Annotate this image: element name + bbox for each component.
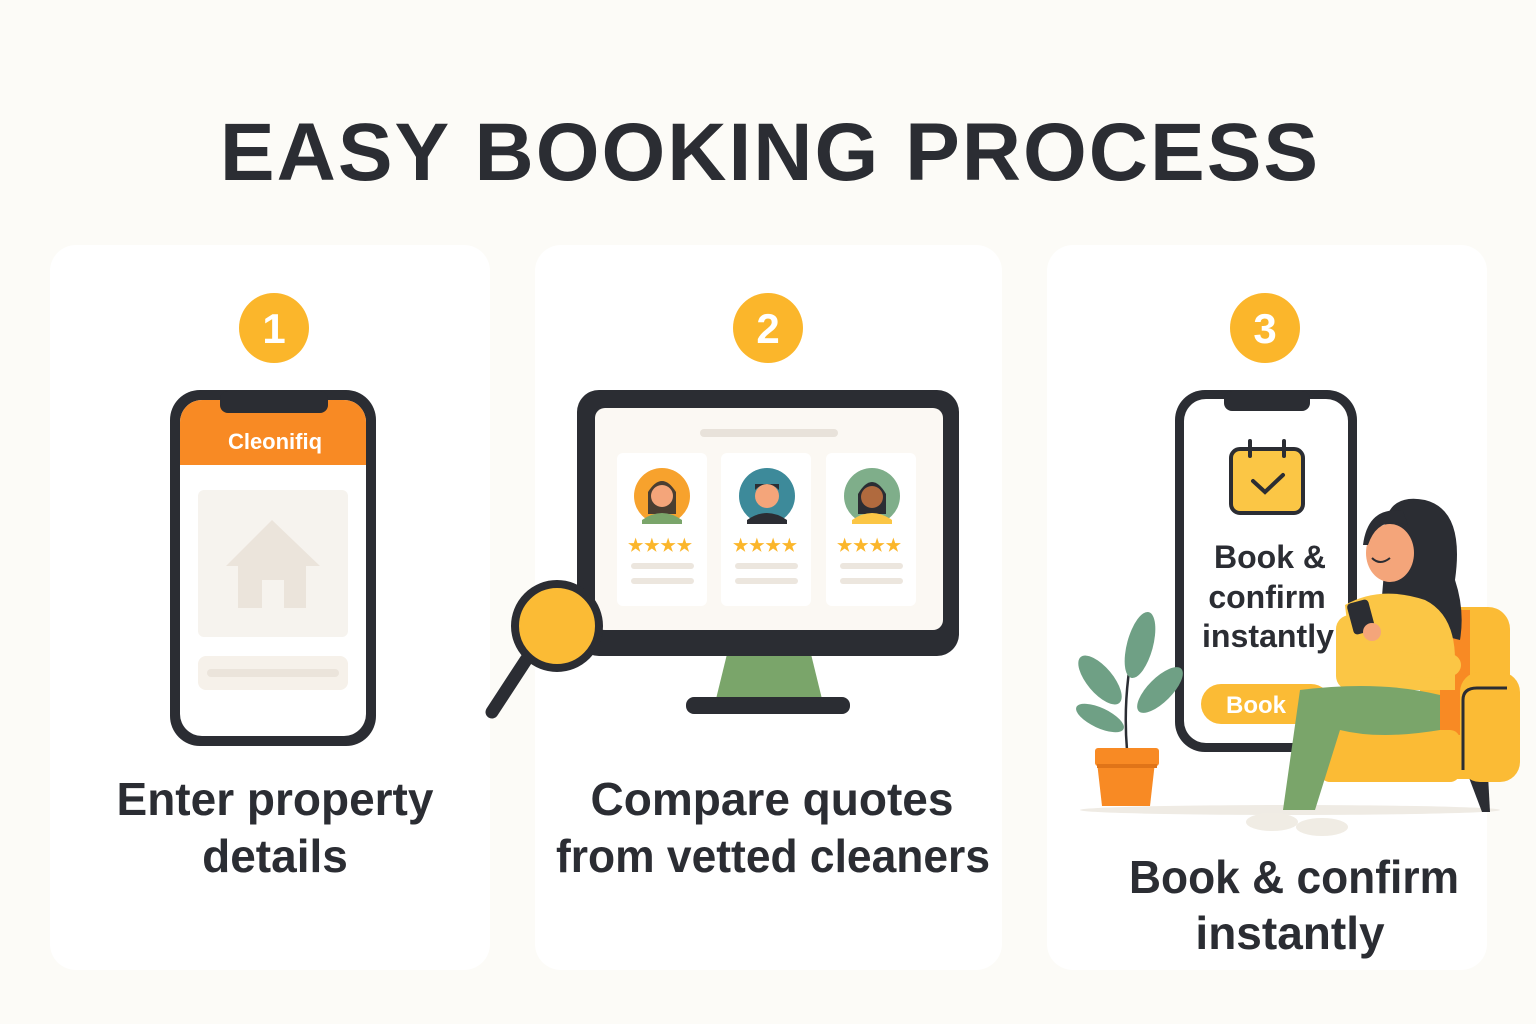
icon: phone with booking: Book & (1214, 539, 1326, 575)
icon: monitor with cleaner profiles: ★★★★ (733, 536, 798, 555)
icon: phone with property form: Cleonifiq (228, 429, 322, 454)
badge 1: 1 (262, 305, 286, 352)
icon: phone with booking: Book (1226, 692, 1287, 719)
badge 3: 3 (1253, 305, 1277, 352)
icon: phone with booking (1175, 390, 1357, 752)
caption 2: Compare quotes (591, 773, 953, 825)
caption 1 (117, 773, 434, 882)
floor shadow (1080, 805, 1500, 815)
icon: magnifier (492, 584, 599, 712)
caption 3: Book & confirm (1129, 851, 1459, 903)
caption 1: Enter property (117, 773, 434, 825)
panel: step 3 (1047, 245, 1520, 970)
badge 2 (733, 293, 803, 363)
icon: monitor with cleaner profiles (577, 390, 959, 714)
caption 2 (556, 773, 990, 882)
caption 3: instantly (1195, 907, 1385, 959)
title: EASY BOOKING PROCESS (220, 107, 1320, 198)
icon: phone with booking: instantly (1202, 618, 1334, 654)
panel: step 1 (50, 245, 490, 970)
caption 1: details (202, 830, 348, 882)
panel: step 2 (492, 245, 1002, 970)
icon: plant (1071, 609, 1190, 806)
icon: woman on armchair (1246, 499, 1520, 836)
caption 3 (1129, 851, 1459, 959)
caption 2: from vetted cleaners (556, 830, 990, 882)
icon: phone with booking: confirm (1208, 579, 1326, 615)
icon: phone with property form (170, 390, 376, 746)
badge 2: 2 (756, 305, 780, 352)
badge 1 (239, 293, 309, 363)
icon: monitor with cleaner profiles: ★★★★ (837, 536, 902, 555)
badge 3 (1230, 293, 1300, 363)
icon: monitor with cleaner profiles: ★★★★ (628, 536, 693, 555)
